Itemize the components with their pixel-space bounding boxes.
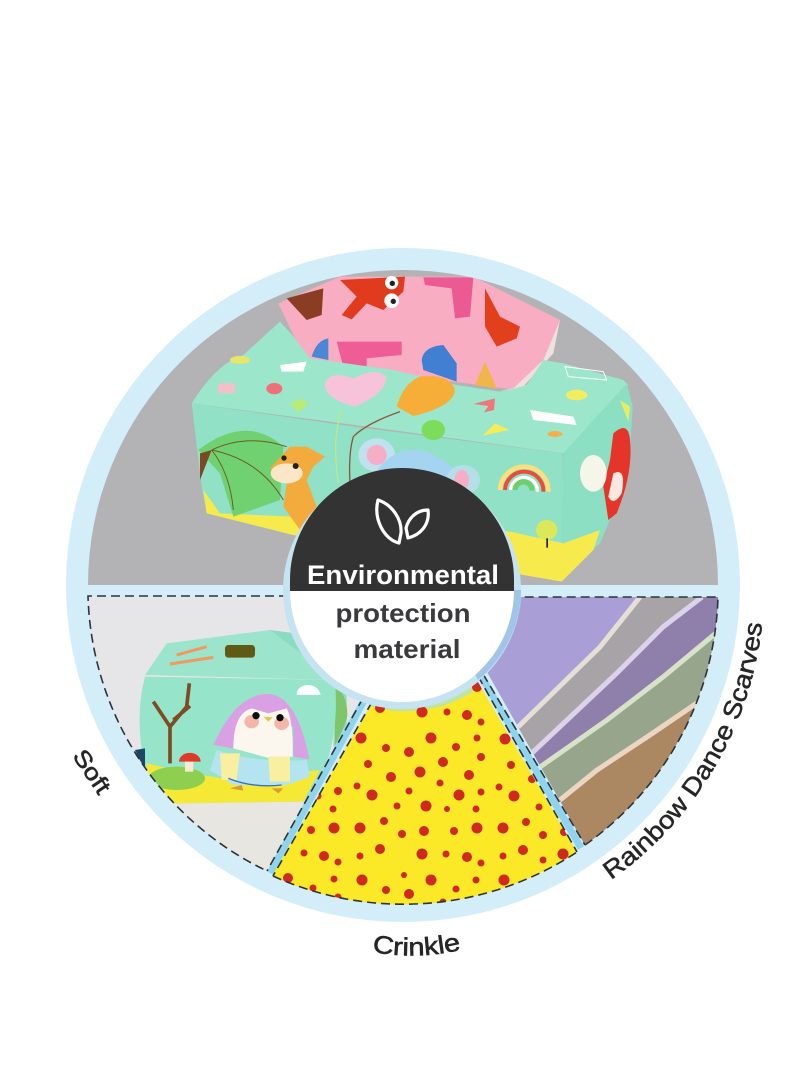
center badge — [283, 468, 521, 709]
icon: small box top — [145, 630, 337, 680]
icon: small box front — [140, 677, 336, 803]
icon: pink scarf out of box — [278, 276, 560, 390]
icon: rainbow — [500, 467, 548, 492]
icon: box right face — [562, 384, 633, 550]
icon: cloud — [297, 685, 321, 695]
icon: balloons — [218, 356, 630, 483]
panel: scarves section — [488, 597, 718, 844]
scarf seams — [518, 597, 716, 800]
icon: penguin — [210, 694, 310, 793]
infographic wheel — [66, 248, 762, 956]
icon: tree — [153, 683, 190, 763]
blue inner rim near scarves — [482, 597, 518, 672]
heading: Environmental: Environmental — [307, 560, 499, 590]
outer light-blue ring — [66, 248, 740, 922]
inner arc tint — [360, 678, 480, 704]
text: protection: protection — [336, 598, 470, 628]
icon: lion on side — [580, 428, 631, 520]
label: Soft: Soft — [68, 744, 117, 799]
icon: box front face — [192, 404, 563, 543]
icon: box top face — [192, 322, 628, 453]
polka dots — [283, 682, 568, 906]
label: Crinkle: Crinkle — [374, 934, 460, 956]
icon: mushroom and grass — [148, 753, 205, 790]
panel: soft section — [88, 597, 359, 871]
dashed outlines — [88, 596, 718, 904]
icon: elephant — [358, 438, 480, 495]
icon: leaves — [377, 500, 428, 543]
panel: crinkle polka-dot section — [272, 682, 577, 904]
icon: palm and giraffe — [198, 431, 325, 530]
text: material: material — [354, 634, 460, 664]
label: Rainbow Dance Scarves: Rainbow Dance Scarves — [602, 623, 762, 880]
panel: top tissue box photo — [80, 260, 730, 585]
divider strips — [270, 674, 581, 873]
